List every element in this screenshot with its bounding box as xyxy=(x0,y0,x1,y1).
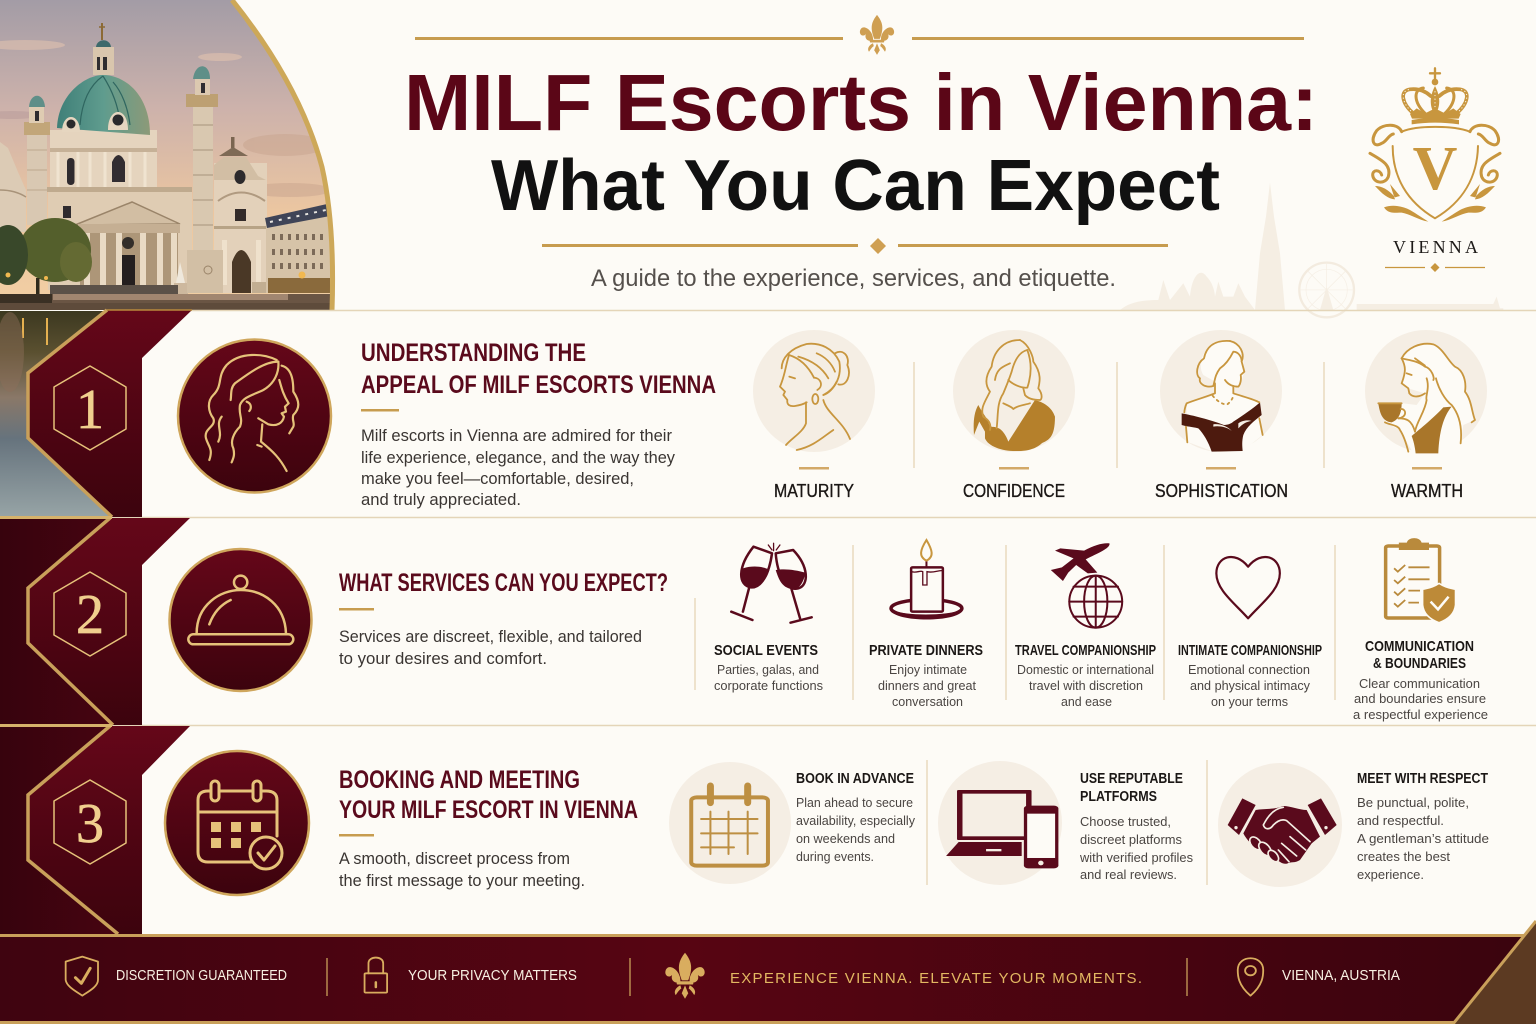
crown xyxy=(1403,68,1467,124)
lake reflection xyxy=(0,311,120,517)
text: section 3 heading xyxy=(339,766,638,824)
clouds xyxy=(0,40,332,197)
step: meet with respect: Be punctual, polite, xyxy=(1357,795,1469,810)
number hexagon 2 xyxy=(54,572,126,656)
footer corner accent xyxy=(1453,921,1536,1024)
step: meet with respect: A gentleman’s attitude xyxy=(1357,831,1489,846)
service: private dinners: conversation xyxy=(892,694,963,709)
subtitle: A guide to the experience, services, and etiquette. xyxy=(591,265,1116,292)
section rules xyxy=(112,310,1536,726)
trait: warmth: WARMTH xyxy=(1391,481,1463,501)
step: use reputable platforms: and real reviews. xyxy=(1080,867,1177,882)
icon: serving cloche medallion xyxy=(170,549,312,691)
title: What You Can Expect xyxy=(491,146,1220,226)
text: section 1 body: life experience, elegance, and the way they xyxy=(361,449,676,467)
photo: Karlskirche at sunset xyxy=(0,0,340,310)
service: travel companionship: and ease xyxy=(1061,694,1112,709)
text: section 2 body: Services are discreet, flexible, and tailored xyxy=(339,628,642,646)
service: intimate companionship xyxy=(1178,557,1322,709)
service: social events: corporate functions xyxy=(714,678,823,693)
privacy xyxy=(365,958,577,993)
service: private dinners: Enjoy intimate xyxy=(889,662,967,677)
step: use reputable platforms: PLATFORMS xyxy=(1080,789,1157,805)
service: communication and boundaries: & BOUNDARIES xyxy=(1373,655,1466,672)
service: intimate companionship: and physical intimacy xyxy=(1190,678,1310,693)
text: section 3 body xyxy=(339,850,585,890)
text: section 1 body: make you feel—comfortable, desired, xyxy=(361,470,634,488)
text: section 1 heading: UNDERSTANDING THE xyxy=(361,339,586,367)
service: travel companionship: TRAVEL COMPANIONSHIP xyxy=(1015,642,1156,659)
step: book in advance: BOOK IN ADVANCE xyxy=(796,771,914,787)
location: VIENNA, AUSTRIA xyxy=(1282,968,1400,984)
text: section 2 body xyxy=(339,628,642,668)
privacy: YOUR PRIVACY MATTERS xyxy=(408,968,577,984)
plaza xyxy=(0,294,340,310)
tree xyxy=(0,218,92,302)
trait: sophistication xyxy=(1155,330,1288,501)
icon: woman profile medallion xyxy=(178,340,331,492)
right column xyxy=(186,66,223,293)
fleur and slogan: EXPERIENCE VIENNA. ELEVATE YOUR MOMENTS. xyxy=(730,970,1142,987)
step: meet with respect: MEET WITH RESPECT xyxy=(1357,771,1488,787)
logo: Vienna crest xyxy=(1370,68,1500,272)
number hexagon 1 xyxy=(54,366,126,450)
dome xyxy=(57,23,150,135)
service: travel companionship: travel with discretion xyxy=(1029,678,1143,693)
text: section 3 body: the first message to your meeting. xyxy=(339,872,585,890)
step: use reputable platforms: with verified profiles xyxy=(1079,850,1193,865)
text: section 3 body: A smooth, discreet process from xyxy=(339,850,570,868)
text: section 2 body: to your desires and comfort. xyxy=(339,650,547,668)
step: meet with respect: and respectful. xyxy=(1357,813,1444,828)
trait: confidence: CONFIDENCE xyxy=(963,481,1065,501)
number hexagon 3: 3 xyxy=(76,793,104,855)
number hexagon 1: 1 xyxy=(76,379,104,441)
logo: Vienna crest: V xyxy=(1413,135,1458,203)
text: section 1 body xyxy=(361,427,676,509)
service: communication and boundaries: COMMUNICATION xyxy=(1365,638,1474,655)
left wing xyxy=(0,142,26,232)
step: book in advance xyxy=(669,762,915,884)
service: communication and boundaries: a respectful experience xyxy=(1353,707,1488,722)
trait: warmth xyxy=(1365,330,1487,501)
step: book in advance: availability, especially xyxy=(796,813,915,828)
step: use reputable platforms xyxy=(938,761,1193,885)
service: social events xyxy=(714,543,823,693)
step: meet with respect: creates the best xyxy=(1357,849,1450,864)
fleur and slogan xyxy=(665,953,1142,999)
service: communication and boundaries xyxy=(1353,538,1488,722)
church body and portico xyxy=(47,130,192,294)
service: social events: SOCIAL EVENTS xyxy=(714,642,818,659)
number hexagon 3 xyxy=(54,780,126,864)
left column xyxy=(24,96,50,225)
text: section 1 body: and truly appreciated. xyxy=(361,491,521,509)
icon: calendar medallion xyxy=(165,751,309,895)
laurel leaves xyxy=(1375,184,1495,222)
icon: fleur-de-lis xyxy=(860,15,894,55)
panel: section 1 number tab xyxy=(27,310,192,517)
service: intimate companionship: INTIMATE COMPANIONSHIP xyxy=(1178,642,1322,659)
service: communication and boundaries: Clear communication xyxy=(1359,676,1480,691)
step: book in advance: on weekends and xyxy=(796,831,895,846)
text: section 3 heading: BOOKING AND MEETING xyxy=(339,766,580,794)
logo: Vienna crest: VIENNA xyxy=(1393,237,1478,257)
trait: maturity: MATURITY xyxy=(774,481,854,501)
location xyxy=(1238,958,1400,996)
service: intimate companionship: on your terms xyxy=(1211,694,1288,709)
top decorative rule xyxy=(415,15,1304,55)
text: section 3 heading: YOUR MILF ESCORT IN VIENNA xyxy=(339,796,638,824)
service: travel companionship: Domestic or international xyxy=(1017,662,1154,677)
service: intimate companionship: Emotional connection xyxy=(1188,662,1310,677)
panel: section 2 number tab xyxy=(0,518,190,725)
panel: section 3 number tab xyxy=(0,726,190,934)
title rule xyxy=(542,238,1168,254)
step: use reputable platforms: discreet platforms xyxy=(1080,832,1182,847)
scrolls xyxy=(1370,125,1500,182)
step: book in advance: during events. xyxy=(796,849,874,864)
service: communication and boundaries: and boundaries ensure xyxy=(1354,691,1486,706)
shield xyxy=(1393,127,1478,218)
service: social events: Parties, galas, and xyxy=(717,662,819,677)
service: travel companionship xyxy=(1015,543,1156,709)
step: book in advance: Plan ahead to secure xyxy=(796,795,913,810)
discretion guaranteed: DISCRETION GUARANTEED xyxy=(116,968,287,984)
discretion guaranteed xyxy=(66,957,287,996)
gold arc frame xyxy=(232,0,333,310)
text: section 2 heading: WHAT SERVICES CAN YOU EXPECT? xyxy=(339,569,668,597)
title: MILF Escorts in Vienna: xyxy=(404,58,1318,147)
step: use reputable platforms: USE REPUTABLE xyxy=(1080,771,1183,787)
trait: confidence xyxy=(953,330,1075,501)
trait: maturity xyxy=(753,330,875,501)
trait: sophistication: SOPHISTICATION xyxy=(1155,481,1288,501)
right wing xyxy=(214,137,269,293)
title xyxy=(404,58,1318,226)
text: section 1 heading xyxy=(361,339,716,399)
step: meet with respect: experience. xyxy=(1357,867,1424,882)
footer band xyxy=(0,921,1536,1024)
step: meet with respect xyxy=(1218,763,1489,887)
skyline watermark xyxy=(1120,183,1503,317)
service: private dinners: dinners and great xyxy=(878,678,976,693)
number hexagon 2: 2 xyxy=(76,584,104,646)
text: section 1 heading: APPEAL OF MILF ESCORTS VIENNA xyxy=(361,371,716,399)
right building xyxy=(265,204,330,293)
text: section 1 body: Milf escorts in Vienna are admired for their xyxy=(361,427,673,445)
step: use reputable platforms: Choose trusted, xyxy=(1080,814,1171,829)
service: private dinners: PRIVATE DINNERS xyxy=(869,642,983,659)
service: private dinners xyxy=(869,540,983,709)
